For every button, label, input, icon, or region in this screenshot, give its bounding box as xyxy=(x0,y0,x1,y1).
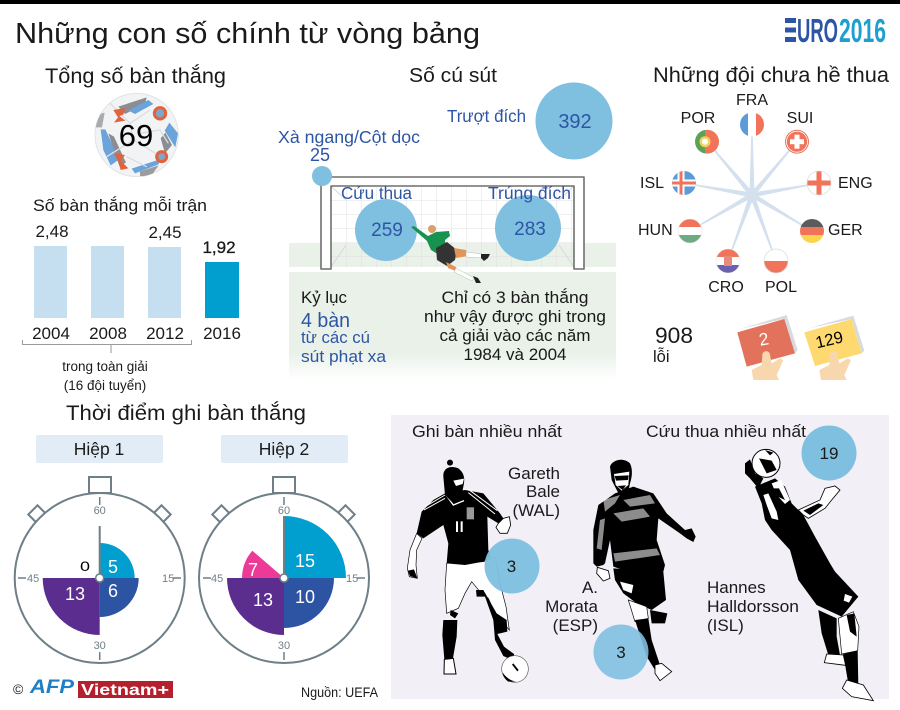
flag: Poland xyxy=(764,249,788,273)
bubble: saves 259 xyxy=(341,183,417,261)
heading: goal timing: Thời điểm ghi bàn thắng xyxy=(66,400,306,425)
subheading: goals per match: Số bàn thắng mỗi trận xyxy=(33,196,207,215)
stopwatch: second half xyxy=(199,477,369,663)
stopwatch: first half: 30 xyxy=(94,640,106,652)
logo: AFP and Vietnam+ xyxy=(13,677,173,699)
bubble: Morata goals: 3 xyxy=(616,643,626,662)
country labels: CRO xyxy=(708,279,744,296)
bracket: 16-team tournaments xyxy=(22,340,192,393)
stopwatch: first half xyxy=(15,477,185,663)
stopwatch: first half: 15 xyxy=(162,573,174,585)
player: Gareth Bale silhouette xyxy=(407,460,528,682)
heading: unbeaten teams: Những đội chưa hề thua xyxy=(653,64,889,87)
bar chart: goals per match: 2004 xyxy=(32,324,70,343)
stopwatch: second half: 15 xyxy=(295,551,315,571)
label: second half xyxy=(221,435,348,463)
icon: yellow card with hand xyxy=(804,316,864,380)
bar chart: goals per match: 2,48 xyxy=(35,222,69,241)
bubble: saves 259: Cứu thua xyxy=(341,183,412,203)
stopwatch: first half: 0 xyxy=(80,558,90,574)
flag: France xyxy=(740,112,764,136)
stopwatch: first half: 5 xyxy=(108,557,118,577)
text: only three such goals: như vậy được ghi trong xyxy=(424,308,606,326)
icon: diving goalkeeper xyxy=(411,225,490,283)
label: Gareth Bale: Gareth xyxy=(508,464,560,483)
bubble: on target 283 xyxy=(488,183,571,261)
label: first half xyxy=(36,435,163,463)
logo: AFP and Vietnam+: © xyxy=(13,681,24,697)
bubble: Halldorsson saves xyxy=(802,426,856,480)
bubble: misses 392: Trượt đích xyxy=(447,106,526,126)
label: Gareth Bale xyxy=(508,464,560,520)
bar chart: goals per match: 2012 xyxy=(146,324,184,343)
label: Gareth Bale: (WAL) xyxy=(512,501,560,520)
icon: yellow card with hand: 129 xyxy=(814,327,845,352)
stopwatch: first half: 13 xyxy=(65,584,85,604)
label: Hannes Halldorsson xyxy=(707,578,799,635)
bracket: 16-team tournaments: trong toàn giải xyxy=(62,359,148,374)
bubble: woodwork 25: Xà ngang/Cột dọc xyxy=(278,127,420,147)
country labels xyxy=(638,92,873,296)
bubble: saves 259: 259 xyxy=(371,220,403,241)
radial spokes xyxy=(685,125,819,262)
flag: Croatia xyxy=(716,249,740,273)
icon: red card with hand: 2 xyxy=(757,328,770,350)
top black bar xyxy=(0,0,900,4)
stopwatch: second half: 7 xyxy=(248,560,258,580)
bar chart: goals per match: 2008 xyxy=(89,324,127,343)
icon: red card with hand xyxy=(737,315,798,380)
text: free-kick record: từ các cú xyxy=(301,329,370,347)
goal frame and net xyxy=(321,177,584,269)
text: only three such goals: Chỉ có 3 bàn thắng xyxy=(442,288,588,307)
label: A. Morata: A. xyxy=(582,578,598,597)
source: Nguồn: UEFA xyxy=(301,685,378,700)
stopwatch: second half: 60 xyxy=(278,505,290,517)
flag: Switzerland xyxy=(785,130,809,154)
country labels: HUN xyxy=(638,222,673,239)
stopwatch: second half: 45 xyxy=(211,573,223,585)
logo: Euro 2016: URO xyxy=(797,12,838,49)
bubble: on target 283: Trúng đích xyxy=(488,183,571,203)
icon: football with total 69: 69 xyxy=(119,118,153,153)
flag: Germany xyxy=(800,219,824,243)
bar chart: goals per match: 1,92 xyxy=(202,238,236,257)
country labels: POL xyxy=(765,279,797,296)
country labels: FRA xyxy=(736,92,768,109)
text: free-kick record: Kỷ lục xyxy=(301,289,347,307)
stopwatch: first half: 6 xyxy=(108,581,118,601)
stopwatch: first half: 60 xyxy=(94,505,106,517)
stopwatch: second half: 15 xyxy=(346,573,358,585)
text: 908 fouls xyxy=(653,323,693,366)
panel: top players xyxy=(391,415,889,701)
stopwatch: second half: 30 xyxy=(278,640,290,652)
text: free-kick record: 4 bàn xyxy=(301,310,350,332)
label: first half: Hiệp 1 xyxy=(74,439,124,459)
label: second half: Hiệp 2 xyxy=(259,439,309,459)
stopwatch: first half: 45 xyxy=(27,573,39,585)
bubble: misses 392: 392 xyxy=(558,111,592,133)
country labels: GER xyxy=(828,222,863,239)
label: A. Morata: Morata xyxy=(545,597,599,616)
bar chart: goals per match xyxy=(32,222,241,343)
flag: England xyxy=(807,171,831,195)
text: free-kick record: sút phạt xa xyxy=(301,348,387,366)
bar chart: goals per match: 2,45 xyxy=(148,223,182,242)
text: free-kick record xyxy=(301,289,387,366)
bubble: Halldorsson saves: 19 xyxy=(820,444,838,463)
country labels: ENG xyxy=(838,175,873,192)
text: only three such goals: 1984 và 2004 xyxy=(464,346,566,364)
label: Hannes Halldorsson: Hannes xyxy=(707,578,766,597)
bracket: 16-team tournaments: (16 đội tuyển) xyxy=(64,378,146,393)
label: A. Morata: (ESP) xyxy=(553,616,598,635)
player: Hannes Halldorsson silhouette xyxy=(745,449,873,701)
bubble: Bale goals xyxy=(484,538,540,594)
country labels: POR xyxy=(681,110,715,127)
flag: Portugal xyxy=(695,130,719,154)
flag: Iceland xyxy=(672,171,696,195)
bubble: Bale goals: 3 xyxy=(507,557,516,576)
title: Những con số chính từ vòng bảng xyxy=(15,18,480,50)
stopwatch: second half: 10 xyxy=(295,587,315,607)
label: Gareth Bale: Bale xyxy=(526,482,560,501)
text: only three such goals xyxy=(424,288,606,364)
country labels: ISL xyxy=(640,175,664,192)
text: only three such goals: cả giải vào các năm xyxy=(440,327,590,345)
bubble: Morata goals xyxy=(594,624,648,680)
player: Alvaro Morata silhouette xyxy=(593,460,696,681)
icon: football with total 69 xyxy=(95,93,178,177)
text: 908 fouls: lỗi xyxy=(653,347,670,366)
label: A. Morata xyxy=(545,578,599,635)
field background xyxy=(289,243,616,380)
logo: AFP and Vietnam+: Vietnam+ xyxy=(81,682,169,699)
logo: AFP and Vietnam+: AFP xyxy=(29,677,74,698)
bubble: on target 283: 283 xyxy=(514,219,546,240)
country labels: SUI xyxy=(787,110,813,127)
heading: top scorers: Ghi bàn nhiều nhất xyxy=(412,423,562,441)
heading: total goals: Tổng số bàn thắng xyxy=(45,65,226,88)
bubble: misses 392 xyxy=(447,82,612,160)
bar chart: goals per match: 2016 xyxy=(203,324,241,343)
stopwatch: second half: 13 xyxy=(253,590,273,610)
label: Hannes Halldorsson: Halldorsson xyxy=(707,597,799,616)
bubble: woodwork 25: 25 xyxy=(310,145,330,165)
heading: shots: Số cú sút xyxy=(409,65,497,87)
text: 908 fouls: 908 xyxy=(655,323,693,348)
flag: Hungary xyxy=(678,219,702,243)
heading: most saves: Cứu thua nhiều nhất xyxy=(646,423,806,441)
label: Hannes Halldorsson: (ISL) xyxy=(707,616,744,635)
bubble: woodwork 25 xyxy=(278,127,420,186)
